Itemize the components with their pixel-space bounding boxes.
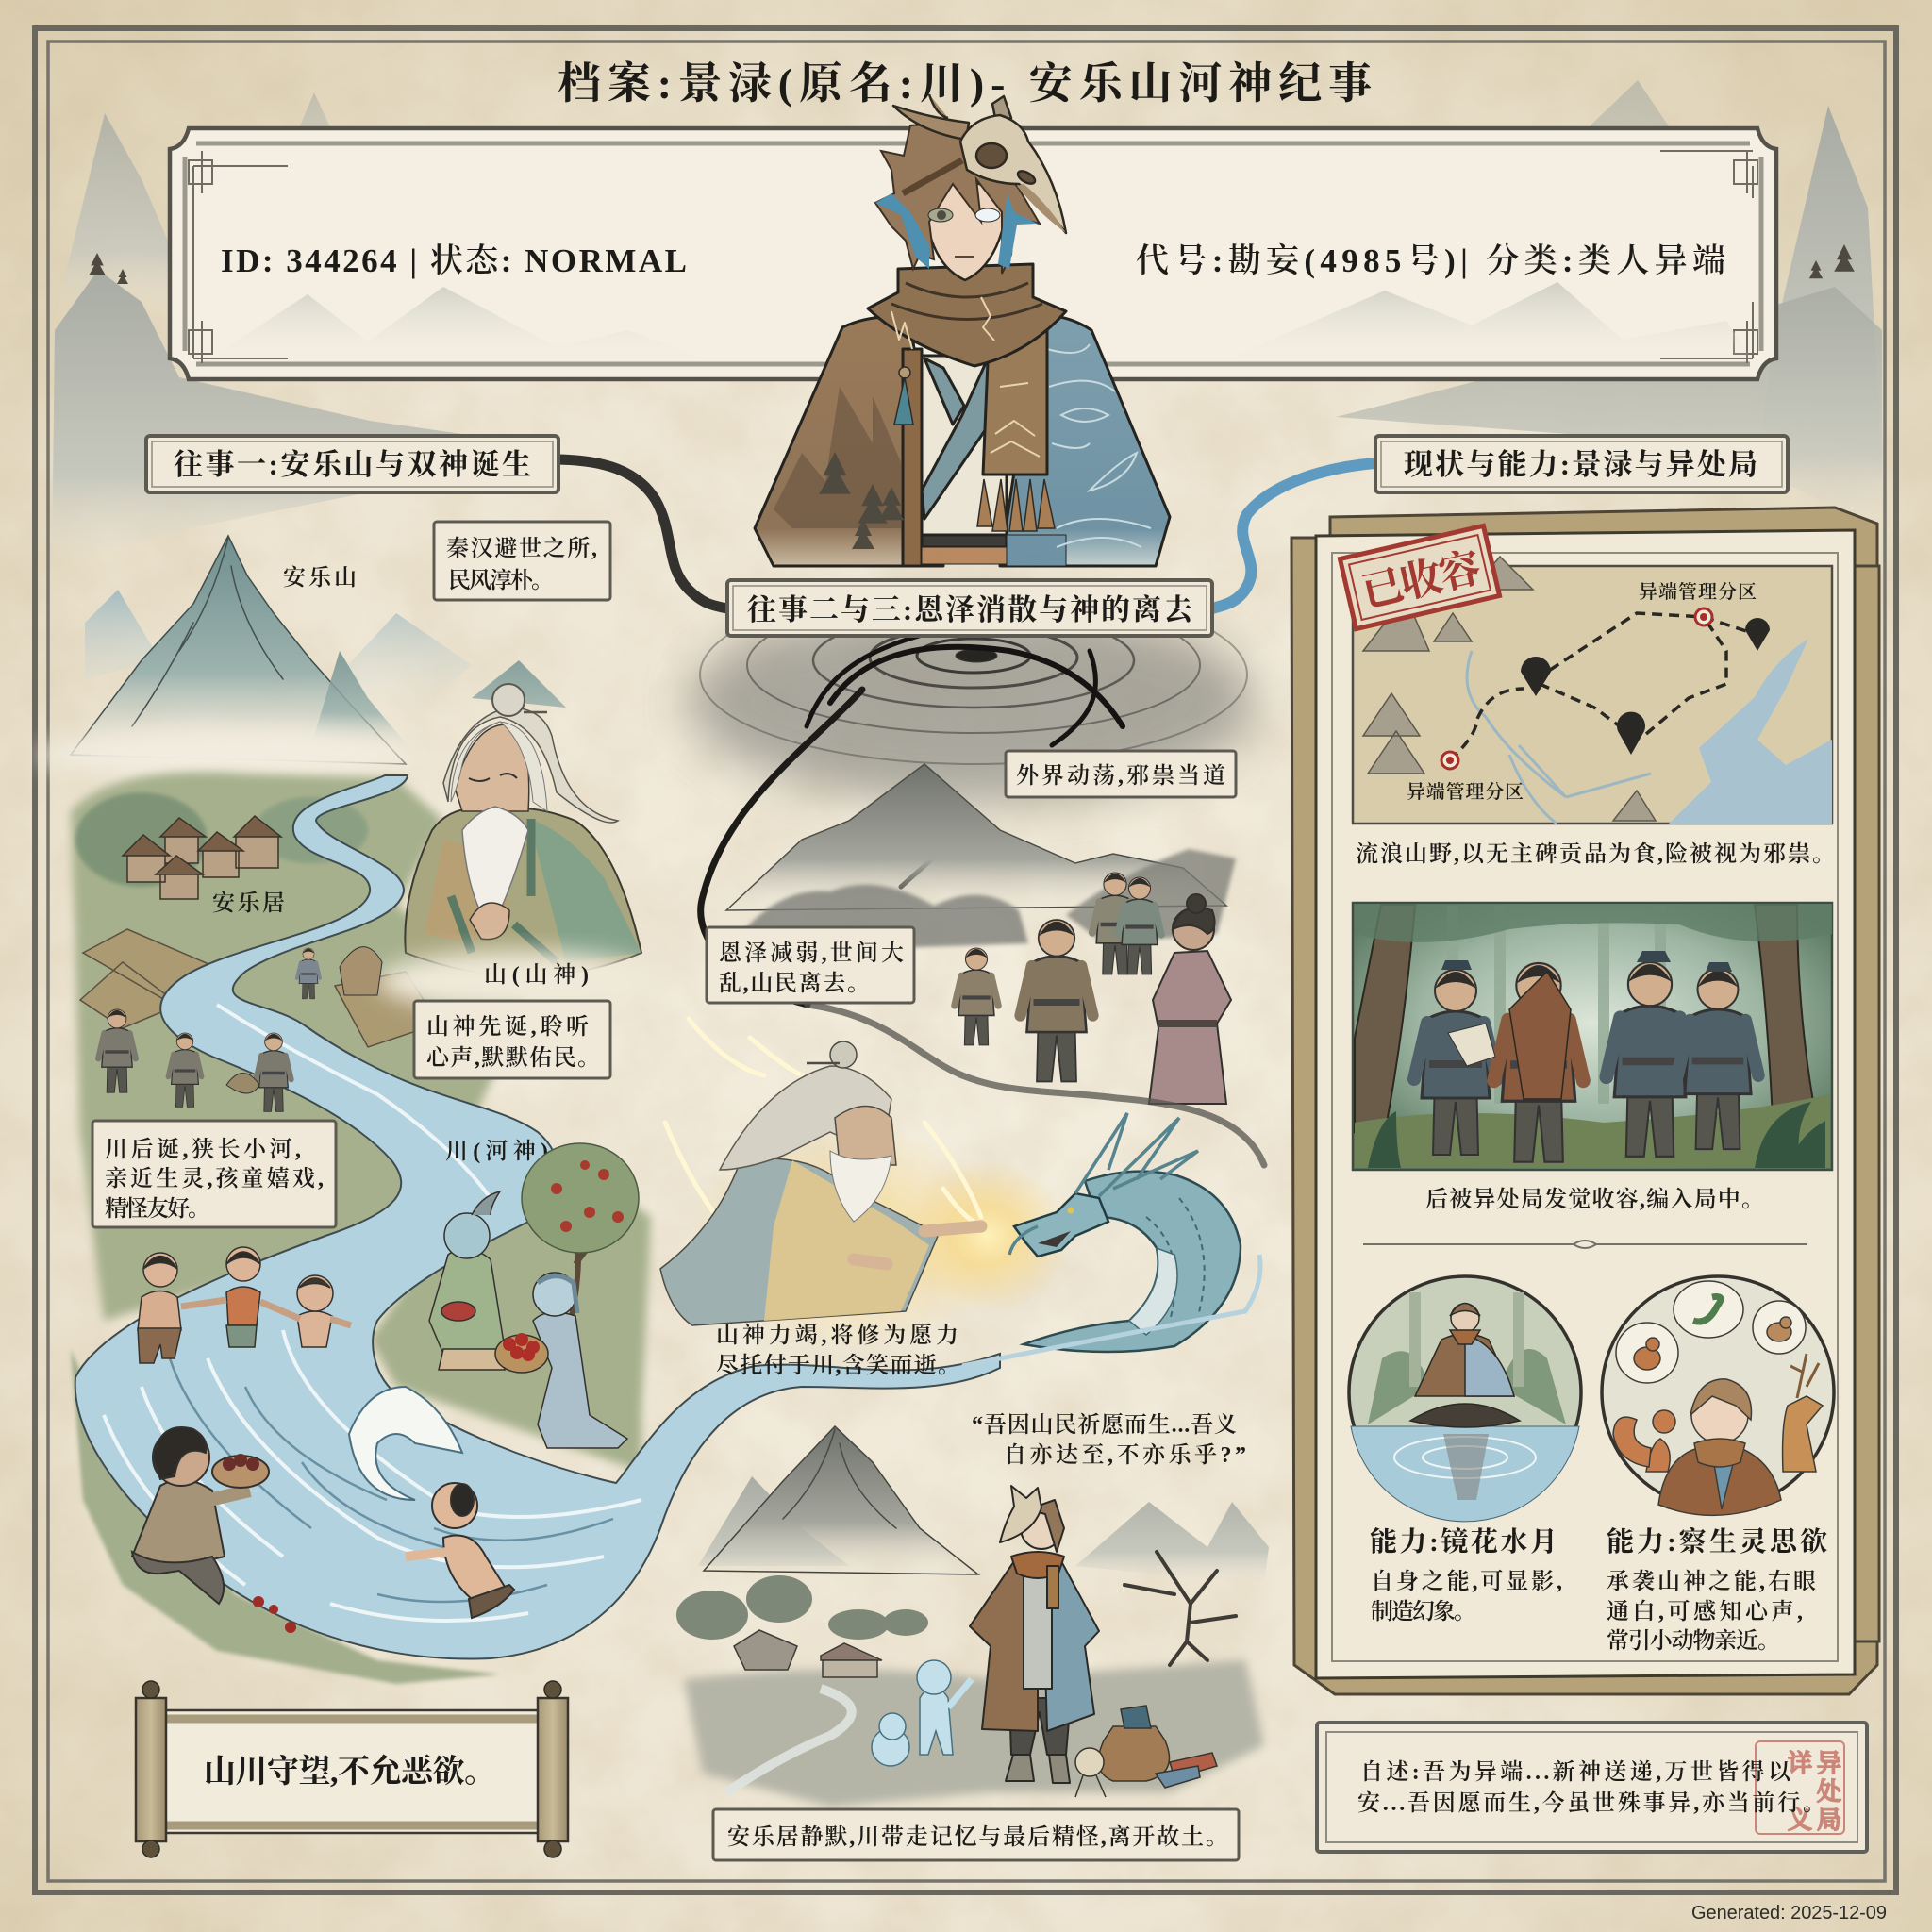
figures: small water spirits	[872, 1660, 972, 1766]
seal	[1756, 1741, 1844, 1834]
ability: perceive desires: 能力:察生灵思欲	[1607, 1526, 1827, 1557]
callout: mountain god: 山神先诞,聆听	[426, 1014, 589, 1040]
section heading: status and abilities: 现状与能力:景渌与异处局	[1404, 448, 1757, 481]
header: ID and status: ID: 344264 | 状态: NORMAL	[221, 242, 687, 279]
ability: perceive desires: 通白,可感知心声,	[1607, 1599, 1803, 1624]
illustration: Anle mountains	[38, 536, 566, 781]
ability vignette: mirror image	[1349, 1276, 1581, 1522]
caption: discovered: 后被异处局发觉收容,编入局中。	[1425, 1187, 1764, 1212]
character: scarf tassels	[977, 479, 1055, 531]
central character	[755, 94, 1170, 566]
ability vignette: sensing creatures	[1602, 1276, 1834, 1515]
self statement panel	[1317, 1723, 1867, 1852]
character: cloak patterns	[774, 344, 1151, 549]
section heading: part one: 往事一:安乐山与双神诞生	[174, 448, 531, 481]
character: head	[875, 123, 1040, 280]
illustration: departure landscape	[676, 1426, 1269, 1807]
character: scarf	[868, 264, 1066, 475]
callout: river god: 川后诞,狭长小河,	[105, 1137, 301, 1162]
section heading: status and abilities	[1375, 436, 1788, 492]
label: mountain god: 山(山神)	[484, 962, 589, 988]
illustration: green valley	[71, 772, 651, 1472]
callout: refuge: 民风淳朴。	[448, 568, 554, 593]
label: Anle mountain: 安乐山	[283, 565, 357, 591]
figures: farmers	[98, 947, 382, 1111]
figure: kneeling child with fruit	[132, 1427, 269, 1604]
illustration: river	[75, 775, 1000, 1659]
seal: 义	[1788, 1807, 1812, 1834]
seal: 处	[1817, 1778, 1841, 1806]
stamp: contained	[1340, 525, 1500, 629]
divider ornament	[1363, 1241, 1807, 1248]
ability: perceive desires: 常引小动物亲近。	[1607, 1628, 1780, 1654]
illustration: breaking wave	[349, 1387, 462, 1500]
callout: river god: 精怪友好。	[105, 1196, 210, 1222]
fruit on the bank	[253, 1596, 296, 1633]
illustration: grey mist trail	[808, 1005, 1264, 1165]
figures: departing villagers	[955, 873, 1231, 1104]
caption: quotation: 自亦达至,不亦乐乎?”	[1004, 1442, 1246, 1468]
callout: favour wanes	[707, 927, 914, 1003]
caption: leaving home	[713, 1809, 1239, 1860]
stamp: contained: 已收容	[1357, 544, 1486, 616]
caption: leaving home: 安乐居静默,川带走记忆与最后精怪,离开故土。	[727, 1824, 1228, 1850]
folder: front page	[1316, 530, 1855, 1678]
callout: river god: 亲近生灵,孩童嬉戏,	[105, 1166, 324, 1191]
illustration: map	[1353, 557, 1832, 824]
callout: refuge	[434, 522, 610, 600]
figure: Jinglu walking	[970, 1486, 1099, 1783]
caption: quotation	[972, 1412, 1246, 1468]
callout: outside turmoil	[1006, 751, 1236, 797]
illustration: black vortex	[689, 585, 1255, 1005]
ability: perceive desires: 承袭山神之能,右眼	[1607, 1569, 1816, 1594]
figures: river spirits	[429, 1191, 627, 1448]
ability: illusion: 制造幻象。	[1371, 1599, 1476, 1624]
callout: refuge: 秦汉避世之所,	[446, 536, 597, 561]
character: cloak	[755, 316, 1170, 566]
illustration: grass bank	[71, 1349, 500, 1684]
illustration: farm fields	[80, 929, 439, 1047]
map label: top: 异端管理分区	[1639, 581, 1757, 603]
map label: bottom: 异端管理分区	[1407, 781, 1524, 803]
figure: water dragon	[962, 1113, 1260, 1366]
seal: 异	[1817, 1750, 1841, 1777]
callout: favour wanes: 乱,山民离去。	[719, 971, 870, 996]
label: river god: 川(河神)	[445, 1139, 548, 1164]
callout: outside turmoil: 外界动荡,邪祟当道	[1016, 763, 1225, 789]
background: faint ink mountains	[52, 80, 1882, 566]
section heading: part one	[146, 436, 558, 492]
seal: 局	[1817, 1807, 1841, 1834]
illustration: fruit tree	[522, 1143, 639, 1321]
self statement text	[1357, 1759, 1825, 1816]
figures: children in river	[138, 1247, 351, 1363]
caption: mountain god's end	[716, 1323, 960, 1378]
callout: mountain god: 心声,默默佑民。	[426, 1045, 600, 1071]
scroll motto	[136, 1681, 568, 1857]
scroll motto: 山川守望,不允恶欲。	[204, 1754, 496, 1790]
panel: middle story column	[660, 580, 1269, 1860]
callout: favour wanes: 恩泽减弱,世间大	[719, 941, 904, 966]
caption: quotation: “吾因山民祈愿而生...吾义	[972, 1412, 1237, 1438]
connector: blue stream	[1212, 463, 1375, 608]
panel: left story column	[38, 522, 1000, 1857]
illustration: bundle and books	[1075, 1706, 1217, 1797]
illustration: golden glow	[665, 1019, 1071, 1349]
callout: river god	[92, 1121, 336, 1227]
section heading: part two and three	[727, 580, 1212, 636]
ability: perceive desires	[1607, 1526, 1827, 1654]
ability: illusion: 自身之能,可显影,	[1371, 1569, 1562, 1594]
header: codename and class: 代号:勘妄(4985号)| 分类:类人异端	[1136, 242, 1725, 279]
folder: back sheets	[1291, 508, 1879, 1694]
callout: mountain god	[414, 1001, 610, 1078]
panel: dossier folder	[1291, 508, 1879, 1694]
figure: mountain god	[377, 684, 660, 1011]
figure: bathing child	[406, 1483, 514, 1618]
character: deer skull mask	[893, 94, 1066, 233]
figure: fading mountain god	[660, 1041, 981, 1325]
seal: 详	[1788, 1750, 1812, 1777]
header panel	[170, 128, 1776, 379]
self statement text: 自述:吾为异端...新神送递,万世皆得以	[1360, 1759, 1792, 1785]
section heading: part two and three: 往事二与三:恩泽消散与神的离去	[747, 593, 1194, 626]
caption: mountain god's end: 尽托付于川,含笑而逝。	[716, 1353, 960, 1378]
generated date: Generated: 2025-12-09	[1691, 1903, 1887, 1924]
self statement text: 安...吾因愿而生,今虽世殊事异,亦当前行。	[1357, 1790, 1825, 1816]
caption: wandering: 流浪山野,以无主碑贡品为食,险被视为邪祟。	[1356, 841, 1835, 867]
ability: illusion: 能力:镜花水月	[1370, 1526, 1557, 1557]
illustration: village	[75, 792, 368, 899]
title: 档案:景渌(原名:川)- 安乐山河神纪事	[558, 59, 1372, 108]
caption: mountain god's end: 山神力竭,将修为愿力	[716, 1323, 958, 1348]
connector: ink stroke	[558, 459, 727, 608]
character: small tassel	[894, 367, 913, 425]
illustration: forest encounter	[1353, 903, 1832, 1170]
ability: illusion	[1370, 1526, 1562, 1624]
illustration: grey mountains	[726, 764, 1236, 953]
label: Anle settlement: 安乐居	[212, 891, 285, 916]
